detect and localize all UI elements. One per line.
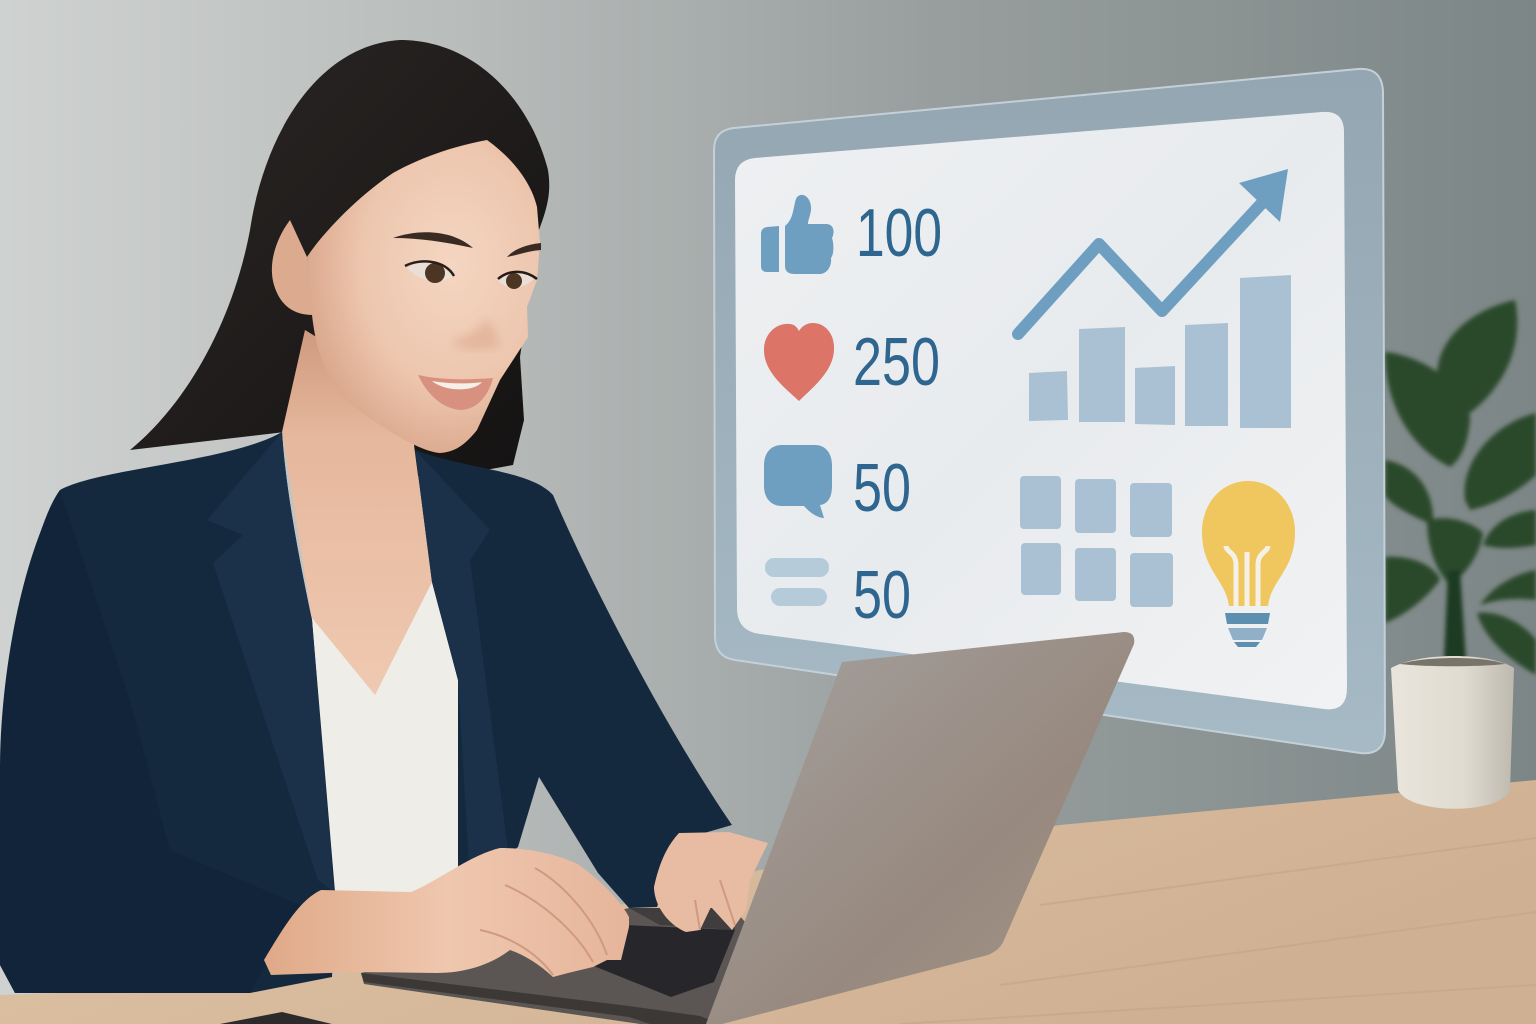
icon: stacked lines bbox=[765, 558, 829, 577]
value: 50: 50 bbox=[853, 450, 911, 526]
icon: heart bbox=[764, 323, 834, 401]
panel screen bbox=[735, 112, 1347, 709]
metric: hearts bbox=[764, 323, 940, 401]
woman bbox=[0, 40, 732, 993]
ear bbox=[272, 220, 313, 315]
blazer sleeve bbox=[0, 490, 300, 993]
white shirt bbox=[312, 582, 458, 895]
mouth bbox=[418, 375, 493, 410]
laptop base bbox=[361, 908, 760, 1024]
value: 250: 250 bbox=[853, 324, 940, 400]
blazer lapels bbox=[207, 432, 334, 892]
value: 100: 100 bbox=[856, 195, 942, 271]
hair back bbox=[130, 40, 549, 480]
icon: light bulb bbox=[1202, 481, 1295, 647]
floating analytics panel bbox=[714, 69, 1385, 753]
icon: thumbs up bbox=[761, 195, 834, 274]
desk bbox=[0, 780, 1536, 1024]
panel frame bbox=[714, 69, 1385, 753]
bar chart bbox=[1029, 275, 1291, 428]
plant pot bbox=[1391, 656, 1514, 809]
metric: shares bbox=[765, 557, 911, 633]
icon: speech bubble bbox=[764, 445, 832, 518]
icon grid bbox=[1020, 476, 1173, 607]
finger separations bbox=[480, 868, 735, 975]
value: 50: 50 bbox=[853, 557, 911, 633]
eyebrows bbox=[393, 232, 541, 257]
nose bbox=[450, 318, 500, 350]
metric: comments bbox=[764, 445, 911, 526]
hands bbox=[264, 832, 768, 977]
metric: likes bbox=[761, 195, 942, 274]
trend arrow bbox=[1018, 169, 1288, 334]
plant bbox=[1385, 300, 1536, 675]
face bbox=[307, 140, 540, 453]
keyboard bbox=[554, 925, 735, 997]
laptop lid bbox=[706, 632, 1134, 1024]
blazer bbox=[0, 432, 732, 993]
dark tablet on desk bbox=[220, 1012, 332, 1024]
neck and chest bbox=[282, 330, 432, 695]
eyes bbox=[407, 262, 453, 281]
